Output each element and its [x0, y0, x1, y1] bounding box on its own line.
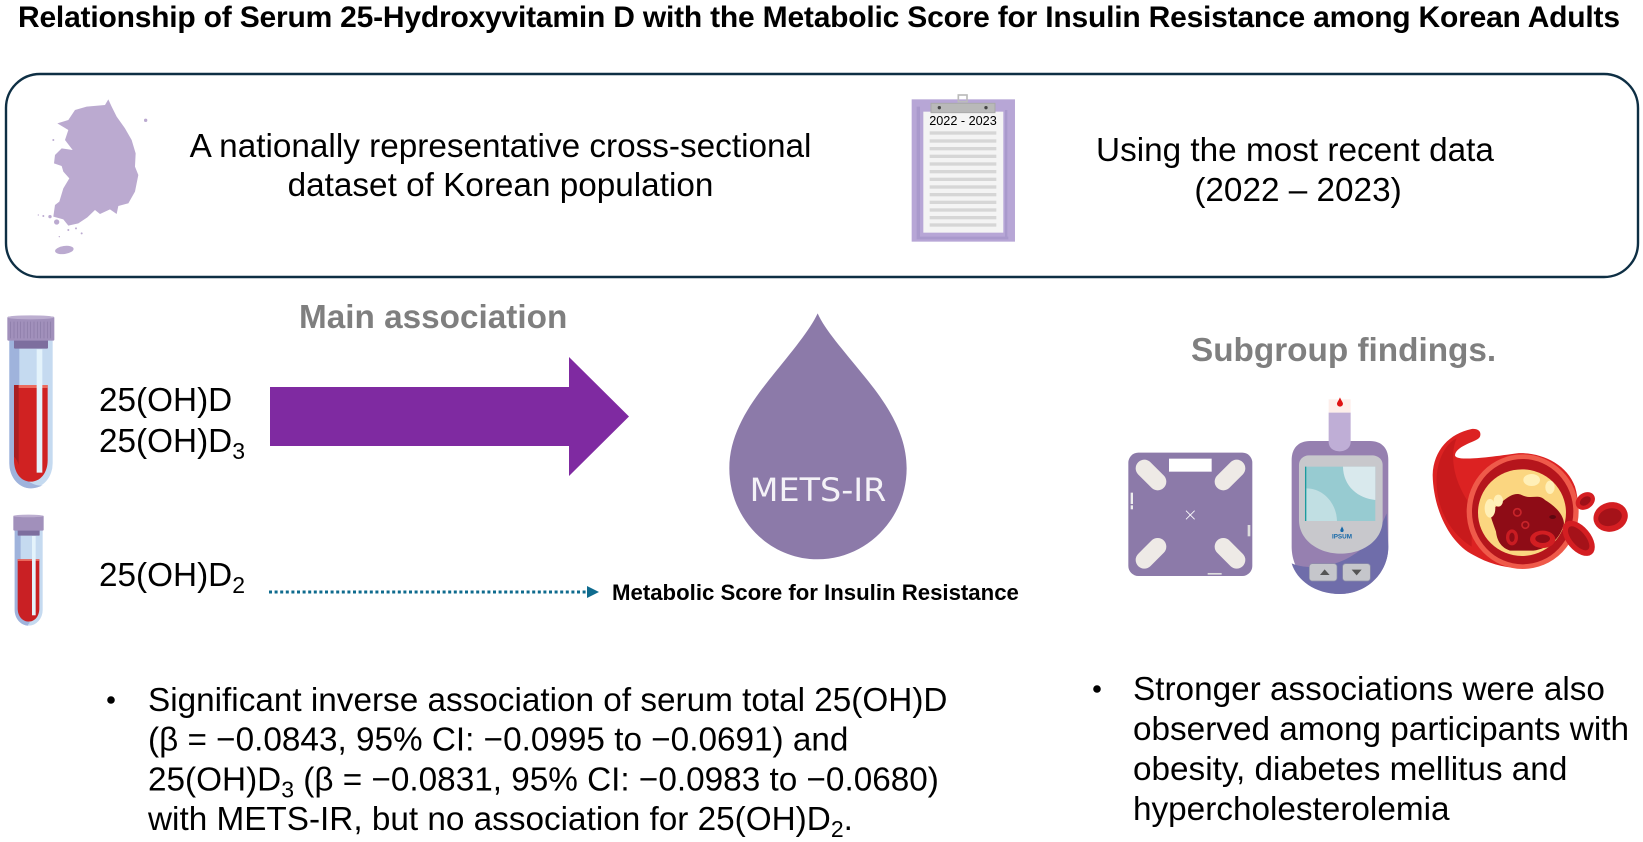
text block: subgroup findings: observed among participants with — [1133, 711, 1629, 748]
panel: study data — [6, 74, 1638, 277]
text block: subgroup findings: hypercholesterolemia — [1133, 791, 1450, 828]
icon: small blood tube — [13, 515, 44, 626]
heading: subgroup findings: Subgroup findings. — [1191, 332, 1496, 369]
title: Relationship of Serum 25-Hydroxyvitamin D with the Metabolic Score for Insulin Resistance among Korean Adults — [18, 1, 1620, 34]
label: METS-IR: METS-IR — [750, 471, 886, 509]
icon: METS-IR drop — [729, 313, 907, 559]
text block: main findings: Significant inverse association of serum total 25(OH)D — [148, 682, 947, 719]
text block: main findings: 25(OH)D — [148, 762, 281, 798]
icon: clipboard 2022-2023: 2022 - 2023 — [929, 114, 997, 128]
arrow: dotted no association — [269, 586, 599, 598]
icon: artery with plaque — [1433, 429, 1631, 569]
text: 25(OH)D and 25(OH)D3: 3 — [232, 438, 245, 464]
text: recent data — [1096, 132, 1494, 209]
text block: main findings: with METS-IR, but no association for 25(OH)D — [148, 801, 831, 838]
text block: main findings: . — [844, 801, 853, 838]
icon: clipboard 2022-2023 — [912, 95, 1015, 242]
text block: main findings: 2 — [831, 816, 844, 842]
text: 25(OH)D2: 2 — [232, 572, 245, 598]
text block: main findings: (β = −0.0843, 95% CI: −0.0995 to −0.0691) and — [148, 722, 848, 758]
arrow: strong association — [270, 357, 629, 476]
text block: subgroup findings: Stronger associations were also — [1133, 671, 1605, 708]
text: dataset description: A nationally representative cross-sectional — [190, 128, 811, 165]
text block: subgroup findings — [1093, 671, 1629, 828]
text: 25(OH)D and 25(OH)D3: 25(OH)D — [99, 423, 232, 460]
text: dataset description — [190, 128, 811, 204]
text: recent data: (2022 – 2023) — [1194, 172, 1402, 209]
icon: weighing scale — [1128, 453, 1252, 576]
icon: large blood tube — [7, 315, 54, 488]
text block: main findings: 3 — [281, 776, 294, 802]
text block: main findings — [107, 682, 947, 842]
icon: glucose meter: IPSUM — [1332, 534, 1352, 541]
text block: subgroup findings: obesity, diabetes mellitus and — [1133, 751, 1567, 788]
heading: main association: Main association — [299, 299, 567, 336]
caption: metabolic score: Metabolic Score for Insulin Resistance — [612, 580, 1019, 605]
icon: glucose meter — [1292, 397, 1388, 594]
icon: map of South Korea — [38, 99, 147, 255]
text: 25(OH)D2: 25(OH)D — [99, 557, 232, 594]
text block: main findings: (β = −0.0831, 95% CI: −0.0983 to −0.0680) — [294, 762, 939, 798]
text: recent data: Using the most recent data — [1096, 132, 1494, 169]
text: dataset description: dataset of Korean population — [288, 167, 713, 204]
text: 25(OH)D and 25(OH)D3: 25(OH)D — [99, 382, 232, 419]
text: 25(OH)D and 25(OH)D3 — [99, 382, 245, 464]
